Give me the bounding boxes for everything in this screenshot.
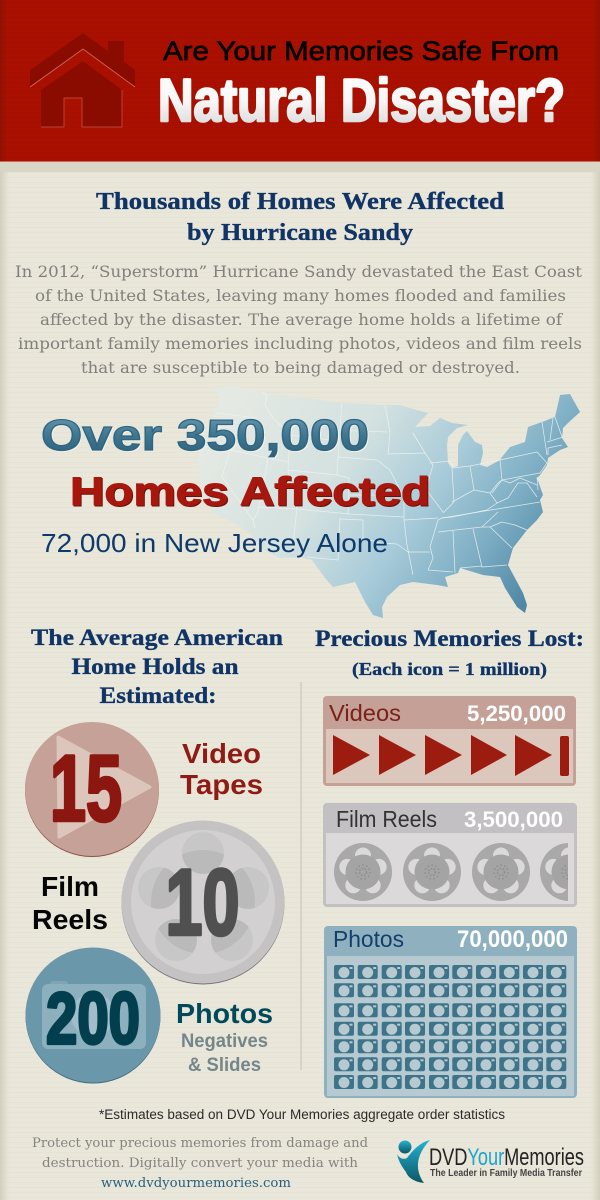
header banner [0,0,600,172]
panel: videos: Videos [329,700,401,726]
intro paragraph: affected by the disaster. The average home holds a lifetime of [40,310,563,329]
badge: 10 film reels [122,820,284,984]
intro paragraph [15,262,583,377]
panel: videos [323,696,576,786]
heading: average home: Home Holds an [72,654,239,680]
call to action: destruction. Digitally convert your media with [42,1156,359,1171]
intro paragraph: In 2012, “Superstorm” Hurricane Sandy devastated the East Coast [15,262,583,281]
heading: memories lost [315,626,584,680]
panel: film reels: Film Reels [336,806,437,832]
footnote: *Estimates based on DVD Your Memories aggregate order statistics [99,1107,505,1122]
label: film reels [32,871,108,935]
label: film reels: Reels [32,904,108,935]
label: video tapes: Tapes [180,769,263,800]
number 200: 200 [46,978,140,1060]
icon: play triangle [58,737,150,837]
title line 1: Are Your Memories Safe From [163,36,559,66]
heading: average home: The Average American [31,625,283,651]
label: photos: Negatives [181,1031,268,1052]
badge: 15 video tapes [25,722,159,857]
label: video tapes: Video [182,738,261,769]
stat: Homes Affected: Homes Affected [70,470,430,514]
number 10: 10 [166,850,240,954]
panel: photos: Photos [333,926,404,952]
stat: New Jersey: 72,000 in New Jersey Alone [41,528,388,558]
label: film reels: Film [41,871,99,902]
label: photos: Photos [176,998,273,1029]
panel: photos [324,926,577,1098]
panel: film reels [323,803,598,907]
icon: camera [42,981,146,1049]
panel: videos: 5,250,000 [467,701,566,726]
intro paragraph: important family memories including photos, videos and film reels [18,334,582,353]
intro paragraph: that are susceptible to being damaged or destroyed. [81,358,520,377]
call to action [32,1136,368,1191]
section heading: Hurricane Sandy: by Hurricane Sandy [187,219,414,246]
heading: average home: Estimated: [100,683,216,709]
panel: photos: 70,000,000 [457,926,568,953]
panel: film reels: 3,500,000 [464,807,563,832]
map: United States [197,385,580,618]
heading: average home [31,625,283,709]
label: photos [176,998,273,1076]
icons: reels [334,843,568,901]
icon: house [30,33,135,127]
call to action: www.dvdyourmemories.com [101,1176,291,1191]
label: photos: & Slides [188,1055,261,1076]
number 15: 15 [50,736,122,840]
label: video tapes [180,738,263,800]
icons: play triangles [333,735,569,776]
intro paragraph: of the United States, leaving many homes flooded and families [35,286,566,305]
section heading: Hurricane Sandy: Thousands of Homes Were Affected [96,188,504,215]
logo: DVD Your Memories [397,1140,584,1183]
icons: cameras [334,965,566,1089]
badge: 200 photos [26,948,160,1084]
heading: memories lost: Precious Memories Lost: [315,626,584,652]
stat: Over 350,000: Over 350,000 [41,411,369,460]
section heading: Hurricane Sandy [96,188,504,246]
call to action: Protect your precious memories from damage and [32,1136,368,1151]
heading: memories lost: (Each icon = 1 million) [352,659,547,680]
icon: logo figure [397,1140,430,1183]
